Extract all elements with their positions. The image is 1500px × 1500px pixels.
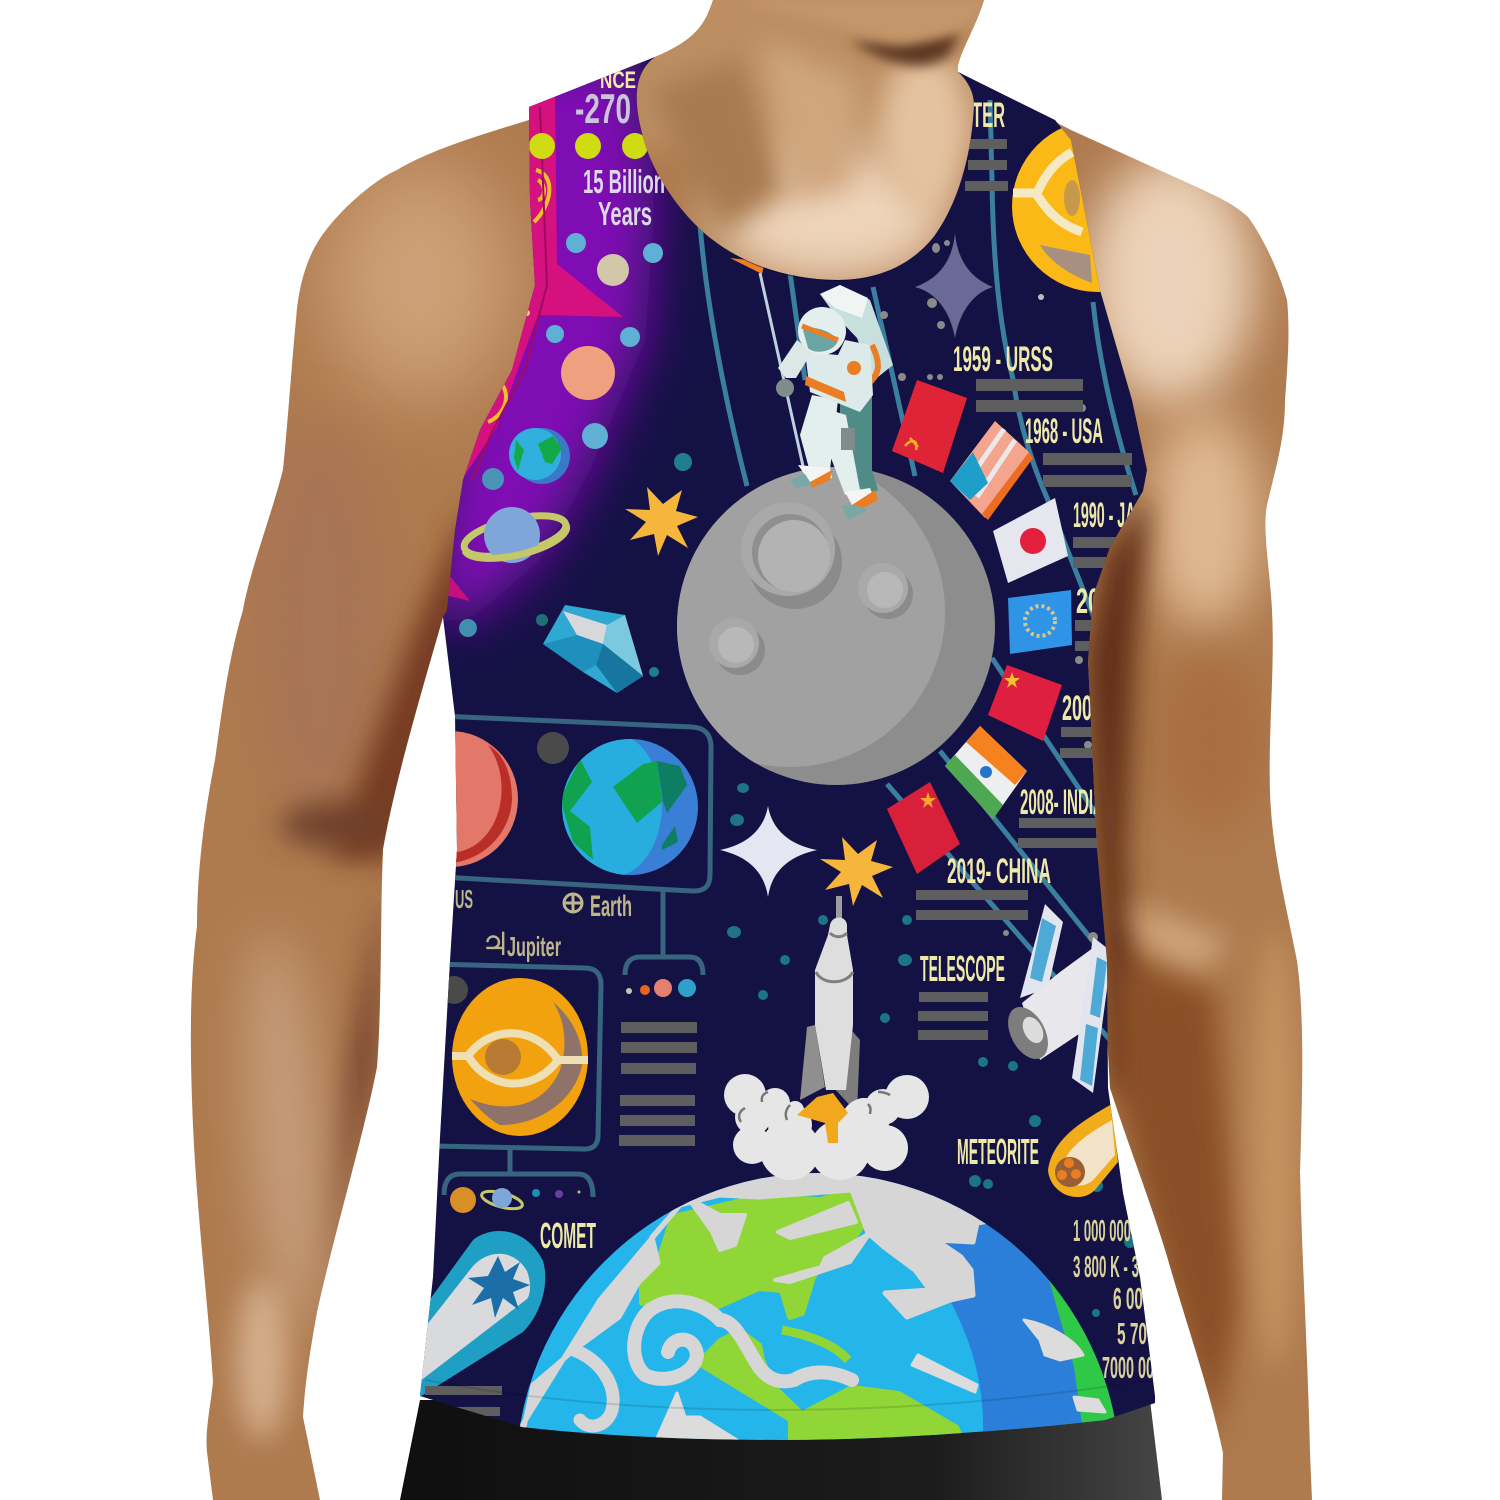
text: 15 billion years [584,169,664,226]
base skin tone [190,0,1312,1500]
green limb [1047,1270,1125,1425]
timeline: country labels: 1968 - USA [1025,412,1103,451]
hem line [425,1380,1150,1410]
neck tone [637,0,984,154]
shadow leg [840,390,878,500]
tip [836,896,842,920]
timeline: country labels: 2019- CHINA [947,852,1051,891]
left forearm highlight [233,928,337,1332]
tank top [420,57,1155,1440]
left inner arm shadow [330,500,470,860]
panel: jupiter [430,964,601,1197]
icon: blue gem [543,605,643,693]
cloud curl bottom left [574,1350,613,1426]
chin shadow [850,30,960,66]
timeline: country labels: 2008- INDIA [1020,783,1104,822]
smoke cloud [724,1074,929,1180]
body [815,918,853,1090]
icon: comet [415,1231,545,1400]
heading: temperature: -270 [575,85,631,132]
mini planets row: outer [450,1187,580,1213]
text: earth label: Earth [590,890,632,923]
fins [800,1025,825,1100]
mini planets row [626,979,696,997]
icon: jupiter on strap [1012,120,1184,292]
grey moon [440,976,468,1004]
tank top: COMET [540,1215,596,1256]
jaw [814,7,968,46]
glove [776,379,794,397]
smoke curves [739,1092,890,1122]
cloud swirl [634,1301,852,1381]
left shoulder light [325,160,515,400]
tank top: 7000 00 [1102,1350,1154,1385]
star dots [880,240,1120,942]
lime land bottom [697,1330,965,1445]
icon: orange star small [820,837,893,906]
tether lines [760,273,803,466]
neck left shading [650,60,790,235]
text placeholder bars top [965,139,1008,191]
flags [887,380,1072,874]
boots [790,465,878,520]
timeline: country labels: 2007 [1062,689,1102,728]
text: jupiter label: Jupiter [507,931,561,962]
flag: China [988,665,1062,741]
backpack [820,285,893,381]
flame [797,1093,848,1143]
flag: Japan [993,498,1068,583]
cloud streaks [654,1320,1105,1445]
neck right light [880,50,970,210]
blue hemisphere [938,1200,1130,1440]
right inner arm shadow [1085,490,1150,1090]
icon: meteorite [1048,1104,1118,1197]
purple glow [430,60,655,620]
backpack white top [820,285,868,318]
product photo: model wearing space tank top [190,0,1312,1500]
text placeholder bars: inner planets [619,1022,697,1146]
left upper arm mid tone [232,422,288,652]
left elbow shadow [280,803,390,847]
crater lower [709,618,765,675]
panel: venus and earth [382,716,711,975]
flag: EU [1008,590,1072,654]
flag: USA [950,421,1033,520]
connector [625,891,703,975]
yellow dots [529,133,648,159]
heading fragment on strap: NCE [600,67,636,94]
grey cloud cap [510,1165,995,1445]
flag: China 2019 [887,782,960,874]
connector [444,1150,593,1197]
text: jupiter label: ♃ [481,925,510,963]
torso [805,340,873,412]
icon: orange star [625,487,698,556]
tank top: TELESCOPE [920,948,1005,989]
ocean [500,1150,1140,1470]
right leg [828,410,860,495]
magenta swirl marks [488,170,549,422]
tank top: METEORITE [957,1131,1039,1172]
icon: hubble telescope [1000,904,1112,1093]
tank top: TER [972,96,1005,135]
small grey moon [537,732,569,764]
teal dots [727,783,1136,1317]
icon: four-point star [915,233,993,338]
sparkle dots [526,310,530,316]
hanging hand [841,428,855,450]
text: distances list: 5 70 [1117,1316,1147,1351]
chest light [710,145,950,285]
timeline: placeholder bars [916,379,1132,920]
tank top: US [455,884,473,914]
astronaut [760,273,893,520]
text: distances list [1073,1213,1154,1385]
neck band line [648,111,968,280]
flag: USSR [892,380,967,473]
text: earth label [564,890,632,923]
magenta starburst [455,95,623,490]
icon: small earth [509,428,570,484]
right forearm shadow [1115,960,1240,1440]
magenta point lower [448,576,470,601]
small planets [459,233,692,677]
right deltoid light [1147,410,1263,630]
helmet stripe [802,326,838,340]
lime streak [782,1330,848,1360]
shorts [400,1400,1162,1500]
flag: India [945,726,1027,819]
icon: saturn [461,507,569,564]
text: 15 billion years: 15 Billion [583,163,665,200]
rocket [724,896,929,1180]
orange belt [805,376,846,402]
fabric background [400,40,1170,1460]
arm and glove [778,340,812,378]
label: telescope [918,948,1005,1040]
timeline: country labels [947,340,1145,891]
planet: jupiter [452,978,588,1136]
orbit lines [700,100,1136,1040]
crater large [741,502,842,609]
orange badge [847,361,861,375]
body rings [816,933,853,982]
right shoulder light [1085,155,1255,405]
text: 15 billion years: Years [598,195,652,232]
lime land [642,1190,870,1317]
tank top: 1990 - JAP [1073,496,1145,535]
text: distances list: 3 800 K - 3 [1073,1249,1139,1284]
neck centre light [760,40,860,200]
model body [190,0,1312,1500]
right upper arm mid tone [1155,650,1265,830]
timeline: country labels: 1959 - URSS [953,340,1053,379]
text: distances list: 1 000 000 [1073,1213,1131,1248]
right forearm highlight [1251,930,1299,1370]
armhole seam [472,107,547,480]
text: distances list: 6 00 [1113,1281,1143,1316]
right elbow light [1130,900,1230,975]
planet: earth [560,733,700,878]
orange pack strap [870,345,878,382]
crater right [858,563,913,619]
left forearm inner shadow [327,906,382,1258]
text: jupiter label [481,925,561,963]
orange fragment under collar [730,258,765,274]
moon [635,457,995,785]
timeline: country labels: 200 [1076,582,1112,621]
comet bars [425,1386,502,1416]
moon lit disc [635,457,945,767]
left forearm lower highlight [236,1280,288,1440]
helmet [798,307,846,355]
earth globe [500,1150,1140,1470]
icon: white four-point star [720,806,817,897]
visor [803,328,838,352]
left leg [800,395,838,472]
grey blobs on land [687,1197,870,1282]
planet: venus [382,731,518,867]
